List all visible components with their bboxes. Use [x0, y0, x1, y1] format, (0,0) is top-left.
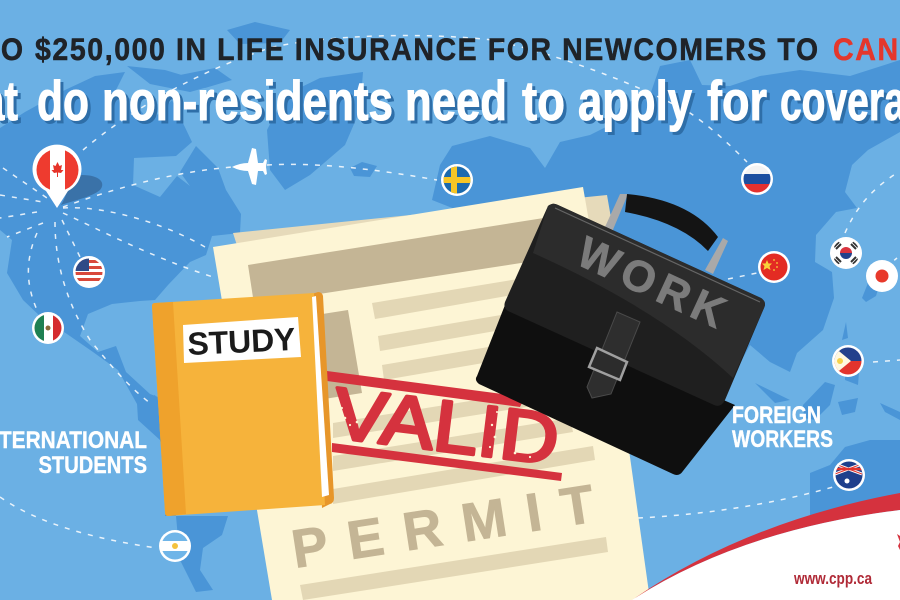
lower body [476, 305, 735, 475]
label: foreign workers: FOREIGN [732, 402, 821, 429]
photo box [265, 310, 362, 406]
work word: WORK [570, 228, 733, 338]
flag: Argentina [159, 530, 191, 562]
study label [183, 317, 301, 363]
pages [312, 296, 329, 497]
label: international students [0, 427, 147, 479]
study book [152, 292, 334, 516]
permit word: PERMIT [288, 474, 598, 580]
front cover [152, 293, 325, 516]
subheadline [0, 69, 900, 132]
south america [137, 395, 228, 592]
study word: STUDY [187, 321, 296, 362]
greenland [267, 72, 363, 190]
iceland [350, 162, 377, 177]
flag: China [758, 251, 790, 283]
subheadline: for [707, 69, 767, 132]
header bar [248, 217, 560, 304]
icon: airplane [232, 148, 267, 185]
permit document [213, 187, 650, 600]
subheadline: do [37, 69, 89, 132]
flag: Australia [833, 459, 865, 491]
website: www.cpp.ca [793, 569, 872, 588]
eurasia [432, 60, 900, 400]
work briefcase [476, 194, 765, 475]
handle [605, 194, 728, 274]
label: foreign workers [732, 402, 833, 453]
flag: Japan [866, 260, 898, 292]
front sheet [213, 187, 650, 600]
heading [0, 33, 900, 132]
subheadline: to [522, 69, 565, 132]
text lines [300, 277, 608, 600]
upper flap [504, 204, 765, 406]
back cover edge [312, 292, 334, 508]
east asian islands [755, 262, 900, 420]
subheadline: apply [578, 69, 692, 132]
logo fragment [897, 534, 900, 550]
strap [587, 312, 640, 398]
flag: USA [73, 256, 105, 288]
flag: Sweden [441, 164, 473, 196]
flag: Philippines [832, 345, 864, 377]
map pin: Canada [32, 145, 102, 208]
flag: Russia [741, 163, 773, 195]
subheadline: non-residents [102, 69, 393, 132]
label: foreign workers: WORKERS [732, 426, 833, 453]
spine [152, 302, 186, 516]
arctic islands [127, 22, 290, 92]
australia [810, 440, 900, 520]
flap highlight [533, 204, 765, 378]
footer swoosh [632, 493, 900, 600]
valid stamp: VALID [329, 373, 563, 480]
flag: Mexico [32, 312, 64, 344]
back sheet [233, 195, 634, 440]
stamp wear [341, 407, 531, 458]
label: international students: STUDENTS [38, 452, 147, 479]
flag: South Korea [830, 237, 862, 269]
buckle [589, 348, 627, 380]
headline: $250,000 IN LIFE INSURANCE FOR NEWCOMERS TO [35, 33, 818, 67]
north america [0, 72, 241, 440]
subheadline: need [405, 69, 507, 132]
